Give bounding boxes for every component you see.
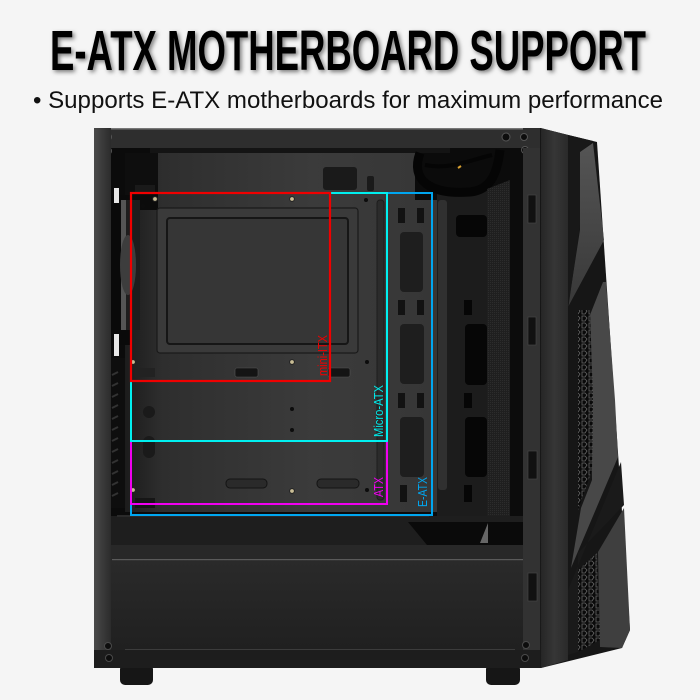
case feet bbox=[120, 664, 520, 685]
upper honeycomb mesh bbox=[578, 310, 593, 510]
upper wedge bbox=[568, 143, 604, 307]
lower honeycomb mesh bbox=[578, 553, 600, 652]
standoff holes bbox=[141, 198, 369, 492]
mini-ITX outline bbox=[131, 193, 330, 381]
PC case bbox=[94, 128, 630, 685]
left grommet bbox=[135, 368, 155, 508]
upper right panel bbox=[571, 282, 618, 568]
size outlines bbox=[131, 193, 432, 515]
Micro-ATX label: Micro-ATX bbox=[372, 384, 386, 437]
right frame strip bbox=[523, 148, 540, 668]
ATX label: ATX bbox=[372, 476, 386, 497]
recessed tray panel bbox=[157, 208, 358, 353]
mesh side panel bbox=[487, 180, 510, 543]
mounting screws bbox=[131, 197, 294, 493]
oblong cutouts bbox=[226, 479, 359, 488]
Micro-ATX outline bbox=[131, 193, 387, 441]
PSU shroud bbox=[94, 515, 540, 668]
motherboard tray bbox=[125, 146, 450, 512]
left frame strip bbox=[94, 128, 111, 668]
vertical rib bbox=[377, 200, 384, 500]
E-ATX label: E-ATX bbox=[416, 476, 430, 507]
small cable slots bbox=[235, 368, 350, 377]
lower angled band bbox=[568, 462, 624, 655]
ATX outline bbox=[131, 441, 387, 504]
expansion column slots bbox=[398, 208, 424, 502]
expansion column cutouts bbox=[400, 232, 424, 477]
case body bbox=[94, 128, 541, 668]
E-ATX outline bbox=[131, 193, 432, 515]
rear fan bbox=[111, 188, 140, 356]
top left cutout bbox=[125, 153, 158, 195]
dark gap bbox=[510, 148, 523, 543]
small top cutouts bbox=[135, 167, 374, 193]
subtitle bullet text: • Supports E-ATX motherboards for maximum performance bbox=[33, 87, 663, 114]
rear vent slats bbox=[111, 358, 125, 508]
top frame bar bbox=[94, 128, 540, 158]
top cable comb bbox=[150, 146, 450, 153]
case interior back bbox=[111, 148, 523, 548]
bezel strip bbox=[541, 128, 568, 668]
mini-ITX label: mini-ITX bbox=[316, 334, 330, 376]
cables bbox=[417, 150, 500, 192]
front bezel bbox=[540, 128, 630, 668]
back compartment bbox=[437, 190, 487, 543]
CPU cutout bbox=[167, 218, 348, 344]
lower right panel bbox=[598, 508, 630, 648]
